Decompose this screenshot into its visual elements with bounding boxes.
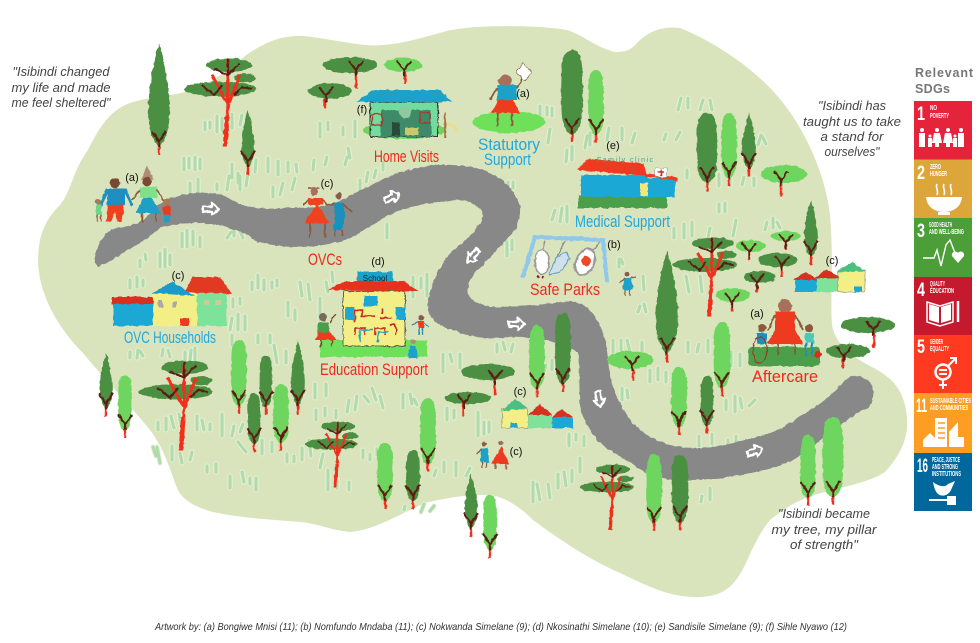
- label: Statutory Support: Statutory: [478, 135, 540, 154]
- cypress tree: [714, 322, 730, 396]
- quote: sheltered: my life and made: [12, 81, 111, 95]
- SDG tile 16: 16: [917, 456, 928, 477]
- cypress tree: [800, 435, 816, 506]
- umbrella tree: [841, 317, 895, 348]
- SDG tile 2: ZERO: [930, 162, 941, 171]
- artist letter labels: [125, 88, 838, 458]
- cypress tree: [291, 340, 305, 414]
- cypress tree: [148, 43, 170, 155]
- SDG tile 2: HUNGER: [930, 169, 947, 178]
- cypress tree: [588, 70, 604, 143]
- SDG tile 1: [914, 101, 972, 160]
- quote: stand: "Isibindi has: [818, 99, 886, 113]
- road: [95, 165, 873, 480]
- road arrows: [203, 188, 765, 459]
- cypress tree: [561, 50, 583, 142]
- cypress tree: [823, 417, 843, 505]
- SDG tile 1: NO: [930, 103, 937, 112]
- family illustration: [95, 165, 171, 223]
- umbrella tree: [826, 344, 870, 368]
- label: OVC Households: OVC Households: [124, 328, 216, 347]
- quote: pillar: [772, 507, 877, 552]
- small houses right: [793, 262, 866, 292]
- SDG tile 4: [914, 277, 972, 335]
- umbrella tree: [308, 83, 352, 108]
- cypress tree: [646, 454, 662, 531]
- cypress tree: [99, 353, 113, 417]
- SDG tile 3: [914, 218, 972, 277]
- label: Statutory Support: [478, 135, 540, 169]
- label: Education Support: Education Support: [320, 360, 428, 379]
- SDG heading: [915, 66, 974, 96]
- umbrella tree: [384, 58, 422, 84]
- aftercare illustration: [748, 299, 822, 366]
- SDG tile 5: EQUALITY: [930, 344, 949, 353]
- artist letter labels: (b): [607, 239, 621, 251]
- cypress tree: [700, 376, 714, 434]
- small houses bottom: [502, 399, 573, 428]
- umbrella tree: [607, 351, 653, 381]
- umbrella tree: [716, 288, 750, 312]
- grass tufts: [130, 98, 780, 512]
- OVC children illustration: [303, 188, 352, 238]
- cypress tree: [804, 200, 818, 265]
- cypress tree: [697, 113, 717, 191]
- label: Medical Support: Medical Support: [575, 212, 670, 231]
- SDG tile 2: 2: [917, 163, 925, 184]
- SDG tile 11: [914, 393, 972, 453]
- label: Home Visits: Home Visits: [374, 147, 439, 166]
- SDG tile 1: POVERTY: [930, 111, 949, 120]
- umbrella tree: [771, 231, 801, 250]
- SDG tile 4: QUALITY: [930, 279, 945, 288]
- artwork credits: Artwork by: (a) Bongiwe Mnisi (11); (b) Nomfundo Mndaba (11); (c) Nokwanda Simelane (9); (d) Nkosinathi Simelane (10); (e) Sandisile Simelane (9); (f) Sihle Nyawo (12): [154, 621, 847, 633]
- cypress tree: [231, 340, 247, 414]
- artist letter labels: (c): [172, 270, 184, 282]
- swing set: [523, 237, 607, 282]
- acacia tree: [305, 422, 358, 487]
- cypress tree: [656, 250, 678, 362]
- umbrella tree: [323, 57, 377, 89]
- artist letter labels: (a): [750, 308, 764, 320]
- cypress tree: [464, 473, 478, 537]
- artist letter labels: (a): [125, 172, 139, 184]
- quote: pillar: of strength": [790, 538, 859, 552]
- bottom children: [476, 440, 509, 469]
- acacia tree: [139, 361, 213, 451]
- SDG tile 4: 4: [917, 280, 925, 301]
- cypress tree: [118, 375, 132, 438]
- quote: pillar: "Isibindi became: [778, 507, 870, 521]
- artist letter labels: (f): [357, 104, 367, 116]
- cypress tree: [247, 393, 261, 452]
- OVC households houses: [112, 277, 232, 326]
- artist letter labels: (c): [510, 446, 522, 458]
- umbrella tree: [744, 271, 776, 292]
- cypress tree: [420, 398, 436, 472]
- school sign text: School: [363, 274, 387, 283]
- SDG tile 4: EDUCATION: [930, 286, 954, 295]
- cypress tree: [672, 455, 688, 530]
- artist letter labels: (a): [516, 88, 530, 100]
- artist letter labels: (c): [321, 178, 333, 190]
- artist letter labels: (c): [826, 255, 838, 267]
- cypress tree: [529, 325, 545, 397]
- SDG heading: SDGs: [915, 82, 950, 96]
- medical clinic: [577, 159, 678, 208]
- SDG tile 11: 11: [916, 396, 927, 417]
- quote: stand: taught us to take: [803, 115, 901, 129]
- SDG heading: Relevant: [915, 66, 974, 80]
- umbrella tree: [761, 165, 807, 197]
- label: Aftercare: Aftercare: [752, 367, 818, 386]
- cypress tree: [377, 443, 393, 509]
- SDG tile 1: 1: [917, 104, 925, 125]
- label: OVCs: OVCs: [308, 250, 342, 269]
- artist letter labels: (e): [606, 140, 620, 152]
- umbrella tree: [758, 253, 798, 277]
- quote: stand: ourselves": [824, 145, 880, 159]
- home visits house: [357, 90, 457, 139]
- SDG tile 5: GENDER: [930, 337, 943, 346]
- SDG tile 3: 3: [917, 221, 925, 242]
- cypress tree: [259, 356, 273, 415]
- acacia tree: [580, 465, 633, 530]
- quote: stand: a stand for: [820, 130, 884, 144]
- artist letter labels: (d): [371, 256, 385, 268]
- quote: sheltered: "Isibindi changed: [12, 65, 111, 79]
- cypress tree: [555, 313, 571, 392]
- quote: sheltered: [12, 65, 111, 110]
- artist letter labels: (c): [514, 386, 526, 398]
- cypress tree: [406, 450, 420, 509]
- SDG tile 2: [914, 160, 972, 218]
- label: Safe Parks: Safe Parks: [530, 280, 600, 299]
- clinic sign text: Family clinic: [597, 157, 654, 164]
- cypress tree: [742, 113, 756, 177]
- SDG tile 5: 5: [917, 337, 925, 358]
- umbrella tree: [736, 240, 766, 260]
- background landscape blob: [38, 26, 907, 597]
- umbrella tree: [461, 364, 515, 395]
- acacia tree: [672, 237, 737, 317]
- cypress tree: [671, 367, 687, 435]
- quote: pillar: my tree, my pillar: [772, 523, 877, 537]
- cypress tree: [241, 110, 255, 175]
- park child: [619, 272, 636, 296]
- cypress tree: [721, 113, 737, 186]
- quote: sheltered: me feel sheltered": [12, 96, 111, 110]
- quote: stand: [803, 99, 901, 159]
- SDG tile 5: [914, 335, 972, 393]
- umbrella tree: [445, 392, 491, 416]
- SDG tile 16: [914, 453, 972, 511]
- school building: [315, 272, 429, 358]
- label: Statutory Support: Support: [484, 150, 531, 169]
- statutory support woman: [473, 63, 545, 133]
- cypress tree: [273, 384, 289, 451]
- acacia tree: [184, 58, 256, 147]
- cypress tree: [483, 495, 497, 558]
